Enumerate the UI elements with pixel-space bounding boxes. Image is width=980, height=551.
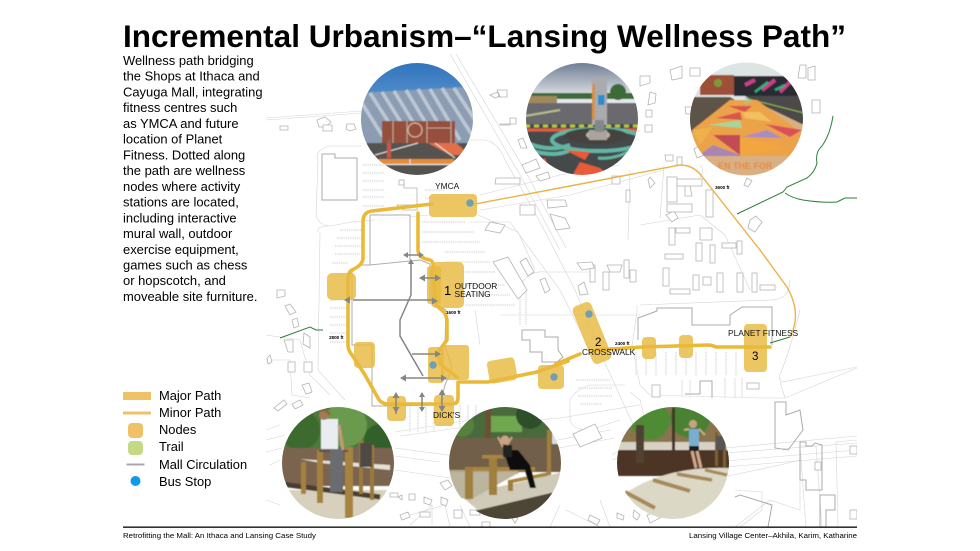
map labels: PLANET FITNESS	[728, 328, 799, 338]
map labels: 1600 ft	[446, 310, 461, 315]
description text block: the path are wellness	[123, 163, 245, 178]
minor path	[470, 165, 795, 337]
mall circulation arrows	[344, 252, 447, 414]
photo: painted crosswalk	[689, 62, 804, 176]
map labels: 2800 ft	[329, 335, 344, 340]
road and lot linework	[266, 54, 857, 527]
footer right text: Lansing Village Center–Akhila, Karim, Katharine	[689, 531, 857, 540]
photo: YMCA mural wall	[360, 62, 475, 176]
photo: bench sit-up exercise	[449, 407, 561, 519]
description text block: Wellness path bridging	[123, 53, 254, 68]
description text block: as YMCA and future	[123, 116, 239, 131]
trail lines	[280, 116, 857, 343]
map labels: YMCA	[435, 181, 460, 191]
photo: colourful plaza totem	[525, 62, 644, 176]
map labels: 1	[444, 283, 451, 298]
map labels: OUTDOOR	[454, 281, 497, 291]
legend: bus stop: Bus Stop	[159, 474, 211, 489]
description text block: location of Planet	[123, 132, 223, 147]
map labels: 2400 ft	[615, 341, 630, 346]
legend: minor path: Minor Path	[159, 405, 221, 420]
parking rows	[330, 165, 742, 432]
legend	[123, 388, 247, 489]
description text block: games such as chess	[123, 258, 247, 272]
description text block: Cayuga Mall, integrating	[123, 84, 263, 100]
map labels: CROSSWALK	[582, 347, 636, 357]
map labels: 2	[595, 337, 601, 349]
description text block: nodes where activity	[123, 179, 241, 194]
map labels	[329, 181, 799, 420]
map labels: 3600 ft	[715, 185, 730, 190]
footer rule	[123, 526, 857, 528]
mall outline	[352, 215, 452, 406]
legend: trail: Trail	[159, 439, 184, 454]
site map	[266, 54, 857, 527]
bus stops	[429, 199, 593, 381]
footer left text: Retrofitting the Mall: An Ithaca and Lansing Case Study	[123, 531, 316, 540]
photo: parallel bars exercise	[280, 403, 396, 520]
description text block: including interactive	[123, 210, 237, 225]
description text block: or hopscotch, and	[123, 273, 226, 288]
description text block: exercise equipment,	[123, 242, 239, 257]
description text block: the Shops at Ithaca and	[123, 69, 260, 84]
photo: balance beams exercise	[616, 398, 730, 520]
title: Incremental Urbanism–“Lansing Wellness Path”	[123, 18, 846, 54]
map labels: SEATING	[454, 289, 491, 299]
legend: mall circulation: Mall Circulation	[159, 457, 247, 472]
nodes	[327, 194, 767, 426]
buildings	[267, 65, 857, 527]
legend: major path: Major Path	[159, 388, 221, 403]
map labels: 3	[752, 351, 758, 363]
description text block: moveable site furniture.	[123, 289, 257, 304]
photo: painted crosswalk: EN THE FOR	[718, 161, 773, 171]
major path	[348, 204, 770, 404]
description text block: stations are located,	[123, 195, 239, 210]
description text block: fitness centres such	[123, 100, 237, 115]
description text block: Fitness. Dotted along	[123, 147, 245, 162]
description text block: mural wall, outdoor	[123, 226, 233, 241]
map labels: DICK'S	[433, 410, 461, 420]
legend: nodes: Nodes	[159, 422, 196, 437]
